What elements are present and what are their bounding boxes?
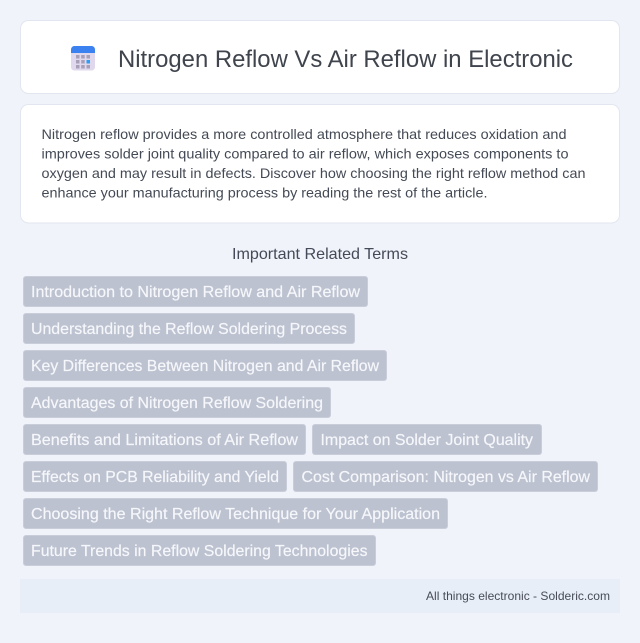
- tag list: [24, 276, 598, 566]
- panel: intro paragraph: [20, 104, 620, 223]
- text block: intro: improves solder joint quality compared to air reflow, which exposes components to: [42, 146, 569, 162]
- tag: choosing: [24, 498, 448, 528]
- tag: introduction: [24, 276, 368, 306]
- tag: effects: [24, 462, 286, 492]
- tag: introduction: Introduction to Nitrogen Reflow and Air Reflow: [31, 284, 360, 301]
- tag: key differences: Key Differences Between Nitrogen and Air Reflow: [31, 358, 379, 375]
- text block: intro: oxygen and may result in defects. Discover how choosing the right reflow method can: [42, 165, 586, 181]
- tag: key differences: [24, 350, 386, 380]
- tag: cost: [294, 462, 598, 492]
- tag: benefits: Benefits and Limitations of Air Reflow: [31, 432, 298, 449]
- icon: calendar: [71, 46, 95, 70]
- title: Nitrogen Reflow Vs Air Reflow in Electronic: [118, 46, 573, 73]
- tag: effects: Effects on PCB Reliability and Yield: [31, 469, 279, 486]
- tag: understanding: [24, 314, 354, 344]
- text block: intro: enhance your manufacturing process by reading the rest of the article.: [42, 184, 488, 200]
- tag: understanding: Understanding the Reflow Soldering Process: [31, 321, 347, 338]
- tag: choosing: Choosing the Right Reflow Technique for Your Application: [31, 506, 440, 523]
- tag: impact: [312, 424, 542, 454]
- footer: [20, 579, 620, 613]
- tag: advantages: Advantages of Nitrogen Reflow Soldering: [31, 395, 323, 412]
- panel: title card: [20, 20, 620, 94]
- tag: cost: Cost Comparison: Nitrogen vs Air Reflow: [302, 469, 590, 486]
- tag: advantages: [24, 388, 330, 418]
- tag: benefits: [24, 424, 306, 454]
- footer: All things electronic - Solderic.com: [426, 589, 610, 603]
- tag: future: Future Trends in Reflow Soldering Technologies: [31, 543, 368, 560]
- tag: future: [24, 536, 376, 566]
- tag: impact: Impact on Solder Joint Quality: [320, 432, 533, 449]
- text block: intro: Nitrogen reflow provides a more controlled atmosphere that reduces oxidation and: [42, 126, 566, 142]
- text block: intro: [42, 126, 586, 200]
- heading: related terms: Important Related Terms: [232, 246, 408, 263]
